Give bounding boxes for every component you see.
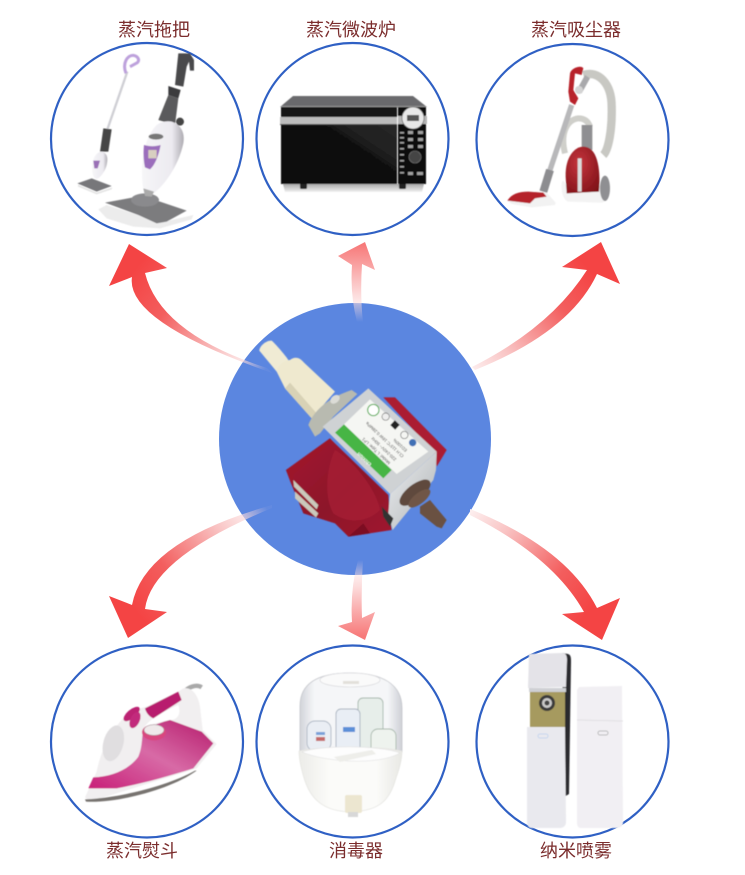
pump rear red cap bbox=[383, 397, 447, 467]
pump label print: ED100% bbox=[392, 438, 408, 453]
pump flange screw bbox=[329, 393, 341, 406]
panel: steam vacuum bbox=[476, 20, 668, 236]
pump terminals bbox=[293, 480, 318, 517]
illustration: microwave oven bbox=[280, 96, 427, 192]
icon: electromagnetic pump bbox=[259, 341, 447, 537]
heading: nano sprayer: 纳米喷雾 bbox=[540, 841, 612, 861]
pump label bbox=[344, 399, 428, 474]
arrow: to steam microwave bbox=[338, 242, 375, 322]
panel: nano sprayer bbox=[476, 646, 668, 861]
heading: steam microwave: 蒸汽微波炉 bbox=[306, 20, 396, 40]
pump flange bbox=[308, 390, 357, 437]
pump label certification marks bbox=[368, 404, 416, 446]
ring bbox=[256, 43, 448, 235]
pump red housing bbox=[286, 438, 392, 537]
arrow: to steam mop bbox=[109, 244, 272, 373]
pump label green strip bbox=[335, 424, 392, 478]
arrow: to steam iron bbox=[109, 505, 272, 638]
ring bbox=[51, 646, 243, 838]
arrow: to nano sprayer bbox=[470, 509, 620, 640]
panel: steam microwave bbox=[256, 20, 448, 235]
pump brown outlet nozzle bbox=[395, 475, 447, 528]
pump inlet nozzle bbox=[259, 341, 335, 418]
illustration: steam iron bbox=[85, 686, 217, 802]
pump metal frame bbox=[323, 388, 437, 494]
illustration: bottle sterilizer bbox=[299, 673, 402, 817]
heading: steam vacuum: 蒸汽吸尘器 bbox=[531, 20, 621, 40]
arrow: to sterilizer bbox=[338, 560, 375, 640]
ring bbox=[51, 43, 243, 235]
illustration: nano mist sprayers bbox=[527, 653, 623, 828]
illustration: canister vacuum bbox=[507, 67, 612, 207]
heading: steam iron: 蒸汽熨斗 bbox=[106, 841, 178, 861]
ring bbox=[476, 44, 668, 236]
pump label print: Model: L Type: LP1 bbox=[360, 436, 391, 466]
panel: steam mop bbox=[51, 20, 243, 235]
illustration: two steam mops bbox=[77, 53, 194, 228]
panel: sterilizer bbox=[256, 646, 448, 861]
panel: steam iron bbox=[51, 646, 243, 861]
ring bbox=[476, 646, 668, 838]
arrow: to steam vacuum bbox=[472, 242, 620, 370]
central circle bbox=[219, 303, 491, 575]
pump label print: Cl.H 115°C 16W 0.28MPa bbox=[364, 420, 405, 459]
pump label brand: chixiun bbox=[356, 451, 373, 467]
heading: sterilizer: 消毒器 bbox=[329, 841, 383, 861]
ring bbox=[256, 646, 448, 838]
pump label print: 220-240V~ 50Hz bbox=[370, 436, 397, 462]
heading: steam mop: 蒸汽拖把 bbox=[118, 20, 190, 40]
